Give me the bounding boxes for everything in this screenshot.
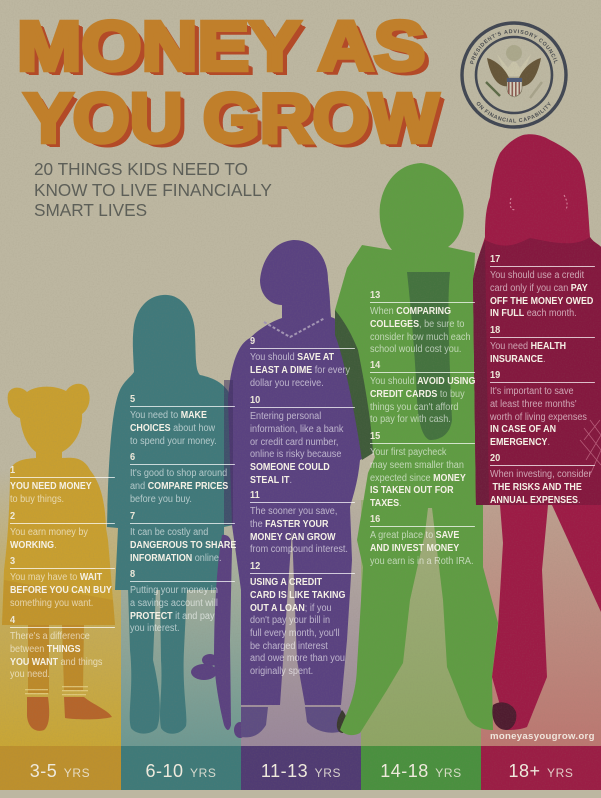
- age label 3-5: 3-5 YRS: [30, 761, 90, 781]
- tip 10: 10: [250, 395, 260, 406]
- tip 7: INFORMATION online.: [130, 553, 222, 564]
- tip 6: before you buy.: [130, 494, 192, 505]
- tip 3: 3: [10, 556, 15, 567]
- tip 1: YOU NEED MONEY: [10, 481, 92, 492]
- website url: moneyasyougrow.org: [490, 731, 595, 742]
- panel: ages 11-13 tips: [250, 336, 355, 677]
- tip 20: ANNUAL EXPENSES.: [490, 495, 581, 506]
- silhouette: adult 18+: [473, 134, 601, 730]
- tip 9: dollar you receive.: [250, 378, 324, 389]
- tip 6: and COMPARE PRICES: [130, 481, 228, 492]
- tip 16: AND INVEST MONEY: [370, 543, 459, 554]
- panel: ages 3-5 tips: [10, 465, 115, 680]
- tip 15: TAXES.: [370, 498, 402, 509]
- subtitle: KNOW TO LIVE FINANCIALLY: [34, 180, 272, 200]
- tip 1: [10, 465, 115, 505]
- tip 20: When investing, consider: [490, 469, 592, 480]
- age label 14-18: 14-18 YRS: [380, 761, 462, 781]
- tip 16: 16: [370, 514, 380, 525]
- tip 13: 13: [370, 290, 380, 301]
- tip 9: [250, 336, 355, 389]
- panel: ages 18+ tips: [490, 254, 595, 506]
- silhouette: child 6-10: [107, 295, 233, 734]
- tip 2: [10, 511, 115, 551]
- age bars: [0, 746, 601, 790]
- subtitle: SMART LIVES: [34, 200, 147, 220]
- tip 20: 20: [490, 453, 500, 464]
- tip 12: OUT A LOAN; if you: [250, 603, 332, 614]
- tip 15: Your first paycheck: [370, 447, 446, 458]
- tip 10: [250, 395, 355, 486]
- emblem: advisory council seal: PRESIDENT'S ADVISORY COUNCIL: [470, 29, 558, 64]
- tip 15: [370, 431, 475, 509]
- tip 19: at least three months': [490, 399, 577, 410]
- age label 11-13: 11-13 YRS: [261, 761, 341, 781]
- tip 4: [10, 615, 115, 680]
- tip 7: [130, 511, 236, 564]
- subtitle: [34, 159, 272, 220]
- tip 3: BEFORE YOU CAN BUY: [10, 585, 112, 596]
- tip 17: OFF THE MONEY OWED: [490, 296, 593, 307]
- tip 9: You should SAVE AT: [250, 352, 334, 363]
- tip 6: 6: [130, 452, 135, 463]
- tip 12: and owe more than you: [250, 653, 345, 664]
- tip 19: It's important to save: [490, 386, 574, 397]
- tip 13: school would cost you.: [370, 344, 461, 355]
- tip 8: 8: [130, 569, 135, 580]
- tip 18: [490, 325, 595, 365]
- tip 3: something you want.: [10, 598, 93, 609]
- tip 13: When COMPARING: [370, 306, 451, 317]
- tip 11: 11: [250, 490, 260, 501]
- column bands: [0, 470, 601, 746]
- tip 11: MONEY CAN GROW: [250, 532, 336, 543]
- silhouette: child 3-5: [2, 384, 115, 731]
- tip 1: 1: [10, 465, 15, 476]
- tip 10: Entering personal: [250, 411, 321, 422]
- tip 10: online is risky because: [250, 449, 341, 460]
- tip 11: The sooner you save,: [250, 506, 337, 517]
- tip 13: consider how much each: [370, 332, 470, 343]
- tip 8: [130, 569, 235, 634]
- tip 10: SOMEONE COULD: [250, 462, 330, 473]
- tip 12: don't pay your bill in: [250, 615, 330, 626]
- tip 11: the FASTER YOUR: [250, 519, 328, 530]
- tip 10: STEAL IT.: [250, 475, 292, 486]
- tip 15: 15: [370, 431, 380, 442]
- tip 4: 4: [10, 615, 15, 626]
- tip 12: USING A CREDIT: [250, 577, 322, 588]
- subtitle: 20 THINGS KIDS NEED TO: [34, 159, 248, 179]
- tip 14: CREDIT CARDS to buy: [370, 389, 465, 400]
- tip 4: There's a difference: [10, 631, 90, 642]
- tip 5: You need to MAKE: [130, 410, 207, 421]
- tip 5: CHOICES about how: [130, 423, 215, 434]
- tip 10: or credit card number,: [250, 437, 338, 448]
- tip 3: [10, 556, 115, 609]
- tip 19: IN CASE OF AN: [490, 424, 556, 435]
- tip 9: LEAST A DIME for every: [250, 365, 350, 376]
- tip 14: 14: [370, 360, 380, 371]
- tip 19: 19: [490, 370, 500, 381]
- tip 12: 12: [250, 561, 260, 572]
- tip 7: 7: [130, 511, 135, 522]
- tip 3: You may have to WAIT: [10, 572, 102, 583]
- tip 2: WORKING.: [10, 540, 57, 551]
- tip 12: [250, 561, 355, 677]
- tip 19: EMERGENCY.: [490, 437, 550, 448]
- tip 17: IN FULL each month.: [490, 308, 577, 319]
- tip 6: It's good to shop around: [130, 468, 227, 479]
- tip 14: You should AVOID USING: [370, 376, 475, 387]
- tip 14: to pay for with cash.: [370, 414, 451, 425]
- tip 12: CARD IS LIKE TAKING: [250, 590, 345, 601]
- tip 16: you earn is in a Roth IRA.: [370, 556, 474, 567]
- tip 8: a savings account will: [130, 598, 218, 609]
- emblem: advisory council seal: ON FINANCIAL CAPABILITY: [476, 102, 551, 122]
- tip 5: 5: [130, 394, 135, 405]
- age label 18+: 18+ YRS: [508, 761, 574, 781]
- tip 1: to buy things.: [10, 494, 64, 505]
- tip 20: THE RISKS AND THE: [492, 482, 582, 493]
- title: MONEY AS: [17, 7, 425, 85]
- tip 12: be charged interest: [250, 641, 328, 652]
- tip 13: COLLEGES, be sure to: [370, 319, 464, 330]
- tip 14: [370, 360, 475, 425]
- emblem: advisory council seal: [460, 21, 568, 129]
- silhouette: teen 14-18: [335, 163, 498, 735]
- tip 8: PROTECT it and pay: [130, 611, 215, 622]
- tip 15: may seem smaller than: [370, 460, 464, 471]
- tip 8: you interest.: [130, 623, 179, 634]
- tip 17: card only if you can PAY: [490, 283, 588, 294]
- panel: ages 6-10 tips: [130, 394, 236, 634]
- tip 2: You earn money by: [10, 527, 88, 538]
- age label 6-10: 6-10 YRS: [145, 761, 216, 781]
- tip 12: full every month, you'll: [250, 628, 340, 639]
- tip 18: INSURANCE.: [490, 354, 546, 365]
- tip 17: 17: [490, 254, 500, 265]
- tip 10: information, like a bank: [250, 424, 343, 435]
- tip 8: Putting your money in: [130, 585, 218, 596]
- tip 15: IS TAKEN OUT FOR: [370, 485, 454, 496]
- tip 17: [490, 254, 595, 319]
- tip 7: DANGEROUS TO SHARE: [130, 540, 236, 551]
- tip 15: expected since MONEY: [370, 473, 466, 484]
- tip 4: between THINGS: [10, 644, 81, 655]
- tip 4: you need.: [10, 669, 50, 680]
- tip 5: to spend your money.: [130, 436, 217, 447]
- panel: ages 14-18 tips: [370, 290, 475, 567]
- tip 16: A great place to SAVE: [370, 530, 459, 541]
- shoes: [27, 697, 112, 731]
- tip 17: You should use a credit: [490, 270, 584, 281]
- tip 14: things you can't afford: [370, 402, 458, 413]
- tip 18: You need HEALTH: [490, 341, 566, 352]
- tip 12: originally spent.: [250, 666, 313, 677]
- tip 11: from compound interest.: [250, 544, 348, 555]
- tip 6: [130, 452, 235, 505]
- tip 13: [370, 290, 475, 355]
- tip 19: worth of living expenses: [490, 412, 587, 423]
- tip 4: YOU WANT and things: [10, 657, 102, 668]
- tip 9: 9: [250, 336, 255, 347]
- tip 7: It can be costly and: [130, 527, 208, 538]
- title: YOU GROW: [24, 79, 439, 157]
- tip 16: [370, 514, 475, 567]
- tip 20: [490, 453, 595, 506]
- tip 19: [490, 370, 595, 448]
- tip 11: [250, 490, 355, 555]
- tip 18: 18: [490, 325, 500, 336]
- silhouette: teen 11-13: [224, 240, 373, 737]
- skateboard: [191, 535, 246, 738]
- tip 2: 2: [10, 511, 15, 522]
- tip 5: [130, 394, 235, 447]
- title: [17, 7, 445, 157]
